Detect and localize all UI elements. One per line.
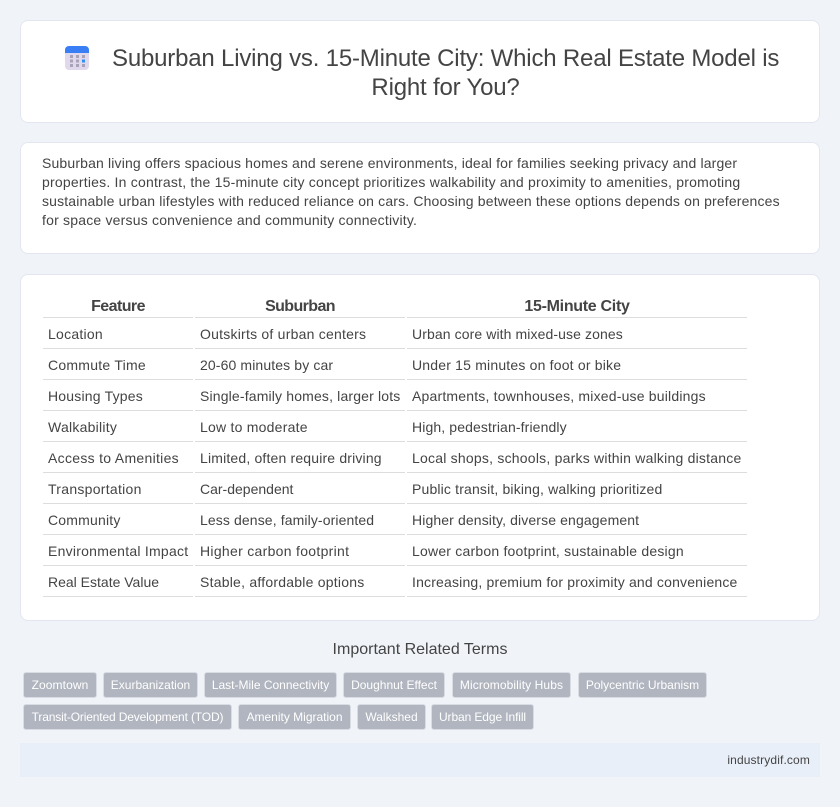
table row: environmental impact: Environmental Impact: [48, 543, 188, 559]
related terms tags: Exurbanization: [111, 678, 190, 692]
table row: commute time: 20-60 minutes by car: [200, 357, 333, 373]
table row: location: Urban core with mixed-use zones: [412, 326, 623, 342]
related terms tags: Zoomtown: [32, 678, 88, 692]
table row: commute time: Under 15 minutes on foot or bike: [412, 357, 621, 373]
table row: community: Higher density, diverse engagement: [412, 512, 639, 528]
related terms tags: Amenity Migration: [246, 710, 343, 724]
table row: real estate value: [48, 574, 738, 590]
table row: access to amenities: Local shops, schools, parks within walking distance: [412, 450, 742, 466]
table header row: 15-Minute City: [524, 298, 630, 315]
panel: comparison table: [20, 274, 820, 621]
intro text: Suburban living offers spacious homes and serene environments, ideal for families seeking privacy and larger: [42, 155, 737, 171]
panel: header: [20, 20, 820, 123]
footer bar: industrydif.com: [727, 753, 810, 767]
title: Right for You?: [371, 74, 520, 101]
table row: housing types: Apartments, townhouses, mixed-use buildings: [412, 388, 706, 404]
title: [112, 45, 779, 101]
table row: environmental impact: Higher carbon footprint: [200, 543, 349, 559]
related terms tags: Last-Mile Connectivity: [212, 678, 329, 692]
table row: housing types: Housing Types: [48, 388, 143, 404]
table row: commute time: [48, 357, 621, 373]
table header row: [91, 298, 630, 315]
table row: commute time: Commute Time: [48, 357, 146, 373]
related terms tags: Polycentric Urbanism: [586, 678, 699, 692]
table row: location: Outskirts of urban centers: [200, 326, 366, 342]
table row: walkability: High, pedestrian-friendly: [412, 419, 567, 435]
footer bar: [20, 743, 820, 777]
table row: access to amenities: Limited, often require driving: [200, 450, 382, 466]
table row: walkability: Walkability: [48, 419, 117, 435]
table row: transportation: Transportation: [48, 481, 142, 497]
table row: walkability: [48, 419, 567, 435]
comparison table: [43, 298, 747, 597]
table row: transportation: Car-dependent: [200, 481, 293, 497]
intro text: properties. In contrast, the 15-minute city concept prioritizes walkability and proximity to amenities, promoting: [42, 174, 740, 190]
table row: access to amenities: [48, 450, 742, 466]
intro text: sustainable urban lifestyles with reduced reliance on cars. Choosing between these options depends on preferences: [42, 193, 780, 209]
table row: access to amenities: Access to Amenities: [48, 450, 179, 466]
table row: location: [48, 326, 623, 342]
table row: housing types: [48, 388, 706, 404]
table header row: Feature: [91, 298, 145, 315]
table row: walkability: Low to moderate: [200, 419, 308, 435]
table row: real estate value: Real Estate Value: [48, 574, 159, 590]
heading: important related terms: Important Related Terms: [333, 641, 507, 658]
panel: introduction: [20, 142, 820, 254]
intro text: for space versus convenience and community connectivity.: [42, 212, 417, 228]
title: Suburban Living vs. 15-Minute City: Which Real Estate Model is: [112, 45, 779, 72]
table row: environmental impact: Lower carbon footprint, sustainable design: [412, 543, 684, 559]
table row: real estate value: Stable, affordable options: [200, 574, 365, 590]
table row: transportation: Public transit, biking, walking prioritized: [412, 481, 662, 497]
table row: location: Location: [48, 326, 103, 342]
related terms tags: Urban Edge Infill: [439, 710, 526, 724]
related terms tags: Transit-Oriented Development (TOD): [32, 710, 223, 724]
table row: environmental impact: [48, 543, 684, 559]
table row: community: [48, 512, 639, 528]
table row: community: Less dense, family-oriented: [200, 512, 374, 528]
table row: real estate value: Increasing, premium for proximity and convenience: [412, 574, 738, 590]
table row: housing types: Single-family homes, larger lots: [200, 388, 400, 404]
related terms tags: Walkshed: [365, 710, 418, 724]
related terms tags: [23, 672, 707, 730]
intro text: [42, 155, 780, 228]
icon: calendar: [65, 46, 89, 70]
table row: transportation: [48, 481, 662, 497]
table header row: Suburban: [265, 298, 335, 315]
related terms tags: Micromobility Hubs: [460, 678, 563, 692]
related terms tags: Doughnut Effect: [351, 678, 437, 692]
table row: community: Community: [48, 512, 121, 528]
